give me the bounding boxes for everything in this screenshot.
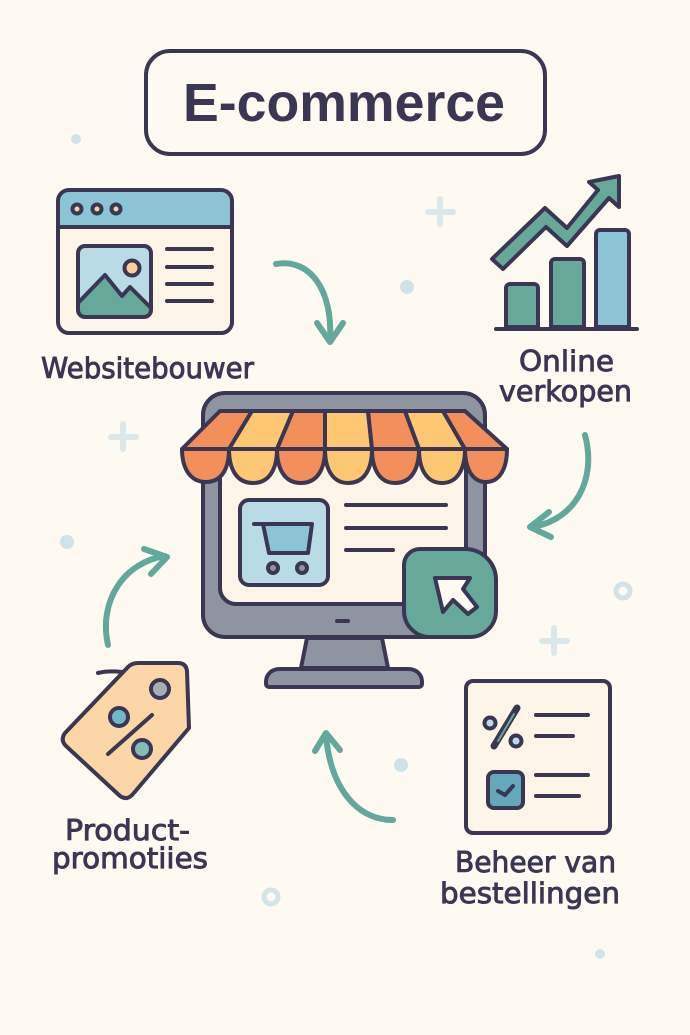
arrow: orders to shop — [315, 733, 393, 820]
label: Beheer van bestellingen — [440, 846, 620, 910]
icon: order management — [466, 681, 610, 833]
monitor body — [203, 393, 485, 637]
title: E-commerce — [183, 73, 505, 133]
label: Product-promotiies: promotiies — [52, 842, 208, 875]
label: Beheer van bestellingen: bestellingen — [440, 877, 620, 910]
icon: monitor storefront — [182, 393, 507, 687]
icon: website builder — [58, 190, 232, 333]
cursor tile — [404, 549, 496, 637]
title — [146, 51, 545, 154]
monitor base — [266, 669, 422, 687]
arrow: sales to shop — [530, 435, 588, 537]
monitor stand — [301, 638, 388, 668]
label: Product-promotiies: Product- — [65, 814, 190, 847]
power button — [335, 619, 350, 623]
label: Online verkopen: Online — [519, 345, 614, 378]
label: Product-promotiies — [52, 814, 208, 875]
screen — [220, 420, 466, 604]
label: Websitebouwer: Websitebouwer — [41, 352, 254, 385]
label: Online verkopen — [499, 345, 632, 408]
arrow: website to shop — [276, 263, 343, 342]
icon: sales chart — [492, 176, 637, 329]
label: Online verkopen: verkopen — [499, 375, 632, 408]
cart tile — [240, 500, 328, 585]
arrow: promotions to shop — [106, 549, 167, 645]
icon: promotion tag — [63, 663, 189, 798]
awning — [182, 411, 507, 483]
label: Beheer van bestellingen: Beheer van — [455, 846, 616, 879]
screen text lines — [346, 505, 446, 550]
